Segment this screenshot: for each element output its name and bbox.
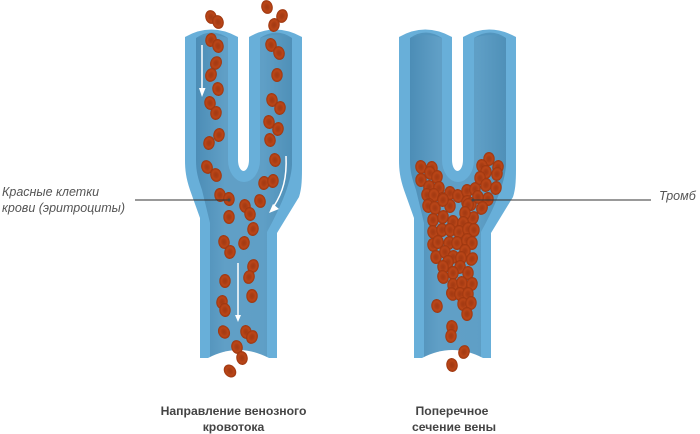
callout line: red blood cells: [135, 198, 230, 202]
arrow: flow curving from right branch: [269, 156, 286, 213]
panel: venous blood flow vein: [185, 0, 302, 380]
arrow: flow down main vein: [235, 263, 241, 322]
label: red blood cells: Красные клетки: [2, 185, 99, 199]
vein body left: [185, 30, 302, 359]
detached blood cells: [430, 298, 471, 373]
callout line: thrombus: [472, 198, 651, 202]
arrow: flow down left branch: [199, 45, 206, 97]
label: thrombus: Тромб: [659, 189, 697, 203]
caption: direction of venous flow: Направление венозного: [161, 404, 306, 418]
red blood cells left: [199, 0, 289, 380]
caption: direction of venous flow: кровотока: [203, 420, 265, 434]
thrombus cell cluster: [414, 152, 505, 321]
vein body right: [399, 30, 516, 359]
caption: vein cross-section: Поперечное: [416, 404, 489, 418]
caption: vein cross-section: сечение вены: [412, 420, 496, 434]
panel: vein cross-section with thrombus: [399, 30, 516, 373]
label: red blood cells: крови (эритроциты): [2, 201, 125, 215]
